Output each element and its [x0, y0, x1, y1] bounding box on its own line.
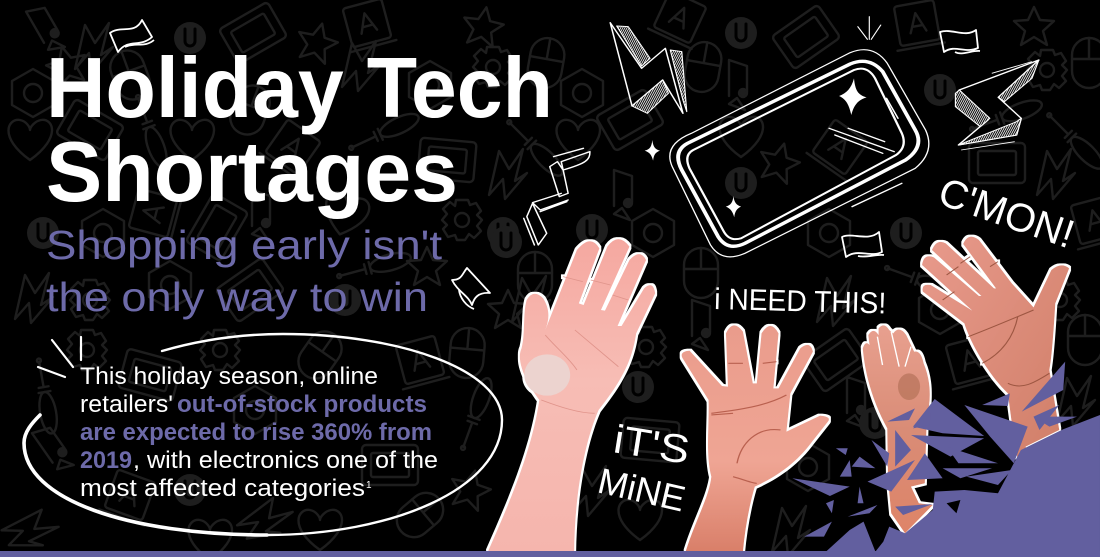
- hand lettering: c'mon: C'MON!: [933, 170, 1080, 257]
- lightning bolt left: [610, 23, 687, 113]
- body text: This holiday season, online: [80, 363, 378, 390]
- flag doodle top right: [940, 30, 980, 53]
- hand 1: large pale hand: [488, 239, 655, 552]
- flag doodle top left: [110, 20, 154, 52]
- body text: [80, 363, 438, 502]
- hand 4: tilted hand top right: [922, 237, 1069, 472]
- title: Holiday Tech: [46, 41, 553, 136]
- hand lettering: mine: MiNE: [594, 460, 689, 520]
- purple shatter shards: [792, 362, 1100, 552]
- title: Shortages: [46, 125, 458, 220]
- flag doodle by subtitle: [452, 268, 490, 309]
- flag doodle below phone: [842, 232, 884, 257]
- lightning bolt right: [955, 60, 1039, 150]
- body text: most affected categories: [80, 475, 365, 502]
- title: [46, 41, 553, 220]
- body text: 2019: [80, 447, 132, 474]
- speech bubble outline: [24, 334, 502, 535]
- ribbon squiggle: [524, 148, 590, 245]
- body text: are expected to rise 360% from: [80, 419, 432, 446]
- body text: out-of-stock products: [177, 391, 427, 418]
- hand 3: small side hand with shattered arm: [863, 325, 933, 533]
- phone line drawing: [645, 17, 929, 257]
- body text: retailers': [80, 391, 173, 418]
- subtitle: [46, 222, 443, 320]
- hand lettering: it's: iT'S: [611, 417, 693, 473]
- hand 2: open palm: [682, 325, 829, 552]
- subtitle: Shopping early isn't: [46, 222, 443, 268]
- body text: , with electronics one of the: [133, 447, 438, 474]
- bottom bar: [0, 551, 1100, 557]
- body text: 1: [366, 480, 372, 491]
- hand lettering: i need this: i NEED THIS!: [714, 283, 887, 321]
- subtitle: the only way to win: [46, 274, 428, 320]
